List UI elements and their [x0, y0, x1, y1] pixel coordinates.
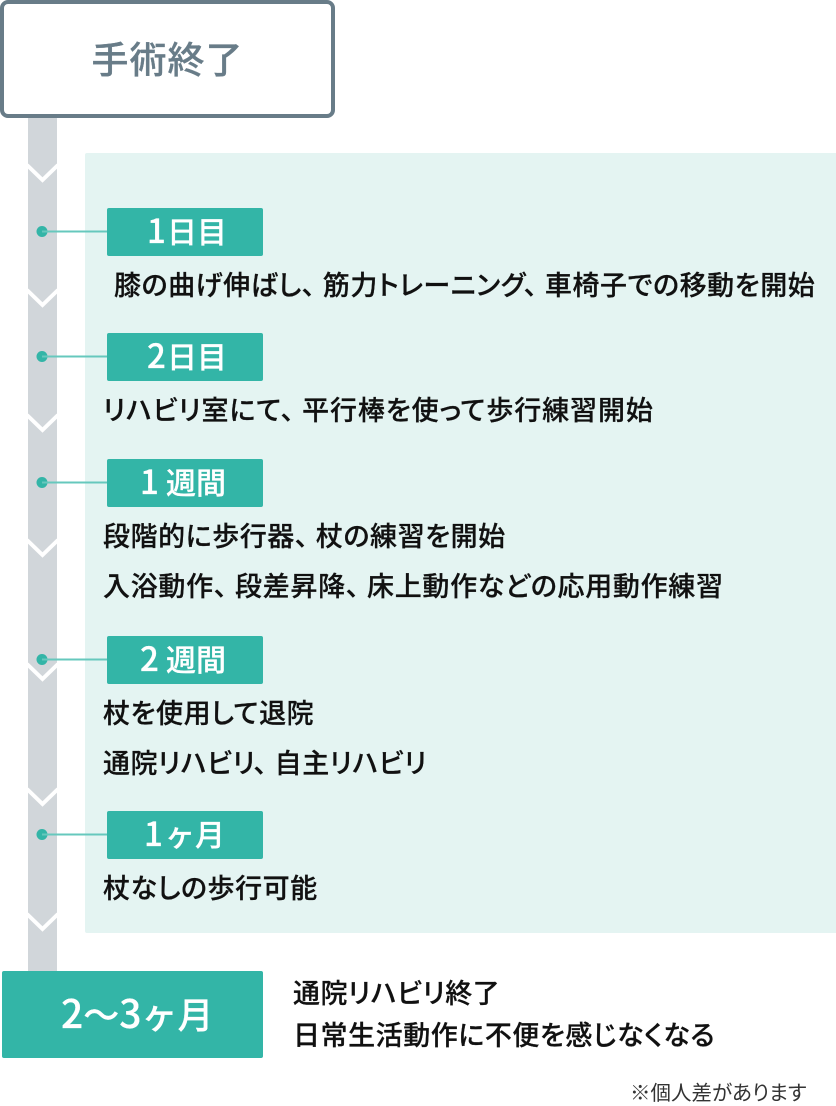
text: week 1 second line: 入浴動作、 段差昇降、 床上動作などの応用動作練習	[103, 565, 724, 604]
text: end of outpatient rehab: 通院リハビリ終了	[293, 972, 500, 1011]
label: week 1: 1	[140, 456, 159, 504]
panel: recovery stages background	[85, 153, 836, 933]
text: week 2 second line: 通院リハビリ、 自主リハビリ	[103, 742, 427, 781]
label: day 2: 日目	[167, 333, 227, 377]
start box: surgery complete	[0, 0, 335, 118]
label: week 2	[107, 636, 263, 684]
end box: 2 to 3 months	[2, 971, 263, 1058]
label: 1 month: ヶ月	[165, 811, 225, 855]
label: day 1: 1	[147, 205, 166, 253]
note: individual differences: ※個人差があります	[630, 1076, 806, 1106]
label: week 1: 週間	[166, 459, 226, 503]
timeline arrow track	[28, 118, 57, 971]
label: week 1	[107, 459, 263, 507]
label: 1 month	[107, 811, 263, 859]
text: 1 month: 杖なしの歩行可能	[103, 867, 318, 906]
label: week 2: 2	[140, 633, 159, 681]
connector lines and dots	[36, 226, 107, 840]
label: day 1	[107, 208, 263, 256]
text: daily life without inconvenience: 日常生活動作に不便を感じなくなる	[293, 1014, 715, 1053]
label: day 2: 2	[147, 330, 166, 378]
end box: 2 to 3 months: 2～3ヶ月	[61, 984, 214, 1040]
label: day 2	[107, 333, 263, 381]
label: 1 month: 1	[144, 808, 163, 856]
label: week 2: 週間	[166, 636, 226, 680]
text: week 1 first line: 段階的に歩行器、 杖の練習を開始	[103, 515, 506, 554]
text: day 1: 膝の曲げ伸ばし、 筋力トレーニング、 車椅子での移動を開始	[114, 264, 815, 303]
text: week 2 first line: 杖を使用して退院	[103, 692, 314, 731]
text: day 2: リハビリ室にて、 平行棒を使って歩行練習開始	[103, 389, 654, 428]
start box: surgery complete: 手術終了	[92, 30, 244, 84]
label: day 1: 日目	[167, 208, 227, 252]
